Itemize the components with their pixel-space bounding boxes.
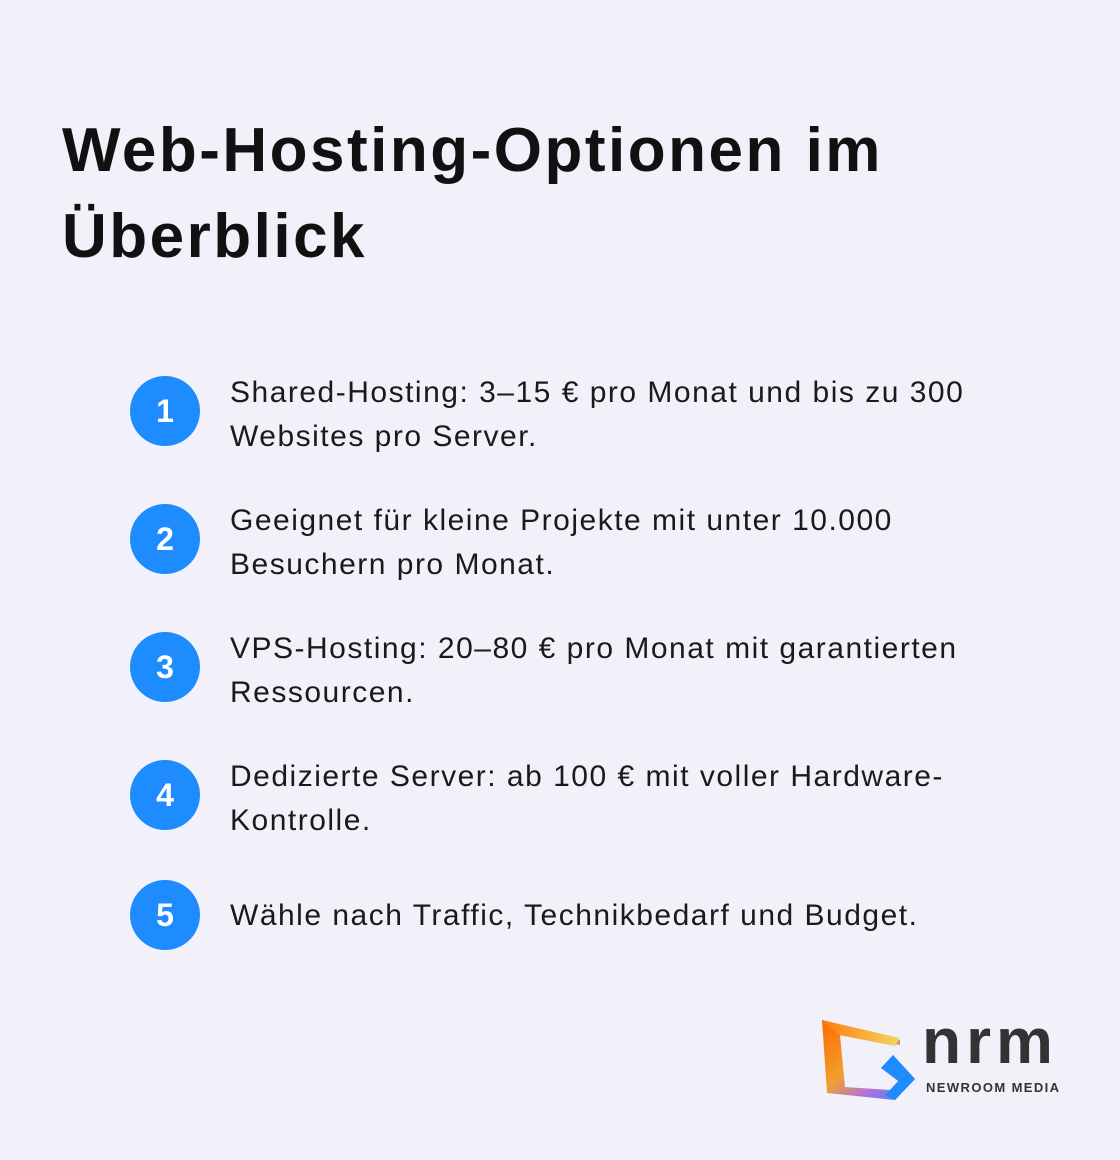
icon: number 2: [130, 504, 200, 574]
item 5: [130, 880, 918, 950]
icon: number 1: 1: [156, 393, 174, 429]
icon: number 1: [130, 376, 200, 446]
icon: number 4: [130, 760, 200, 830]
text 4: [230, 760, 944, 837]
item 2: [130, 504, 893, 581]
icon: number 4: 4: [156, 777, 174, 813]
icon: logo mark: [822, 1020, 915, 1100]
text 3: Ressourcen.: [230, 676, 415, 709]
item 1: [130, 376, 964, 453]
icon: number 2: 2: [156, 521, 174, 557]
icon: number 3: 3: [156, 649, 174, 685]
text 2: Geeignet für kleine Projekte mit unter 10.000: [230, 504, 893, 537]
logo: [822, 1005, 1060, 1100]
logo text: nrm: [922, 1005, 1058, 1077]
title: [62, 116, 883, 271]
text 2: Besuchern pro Monat.: [230, 548, 555, 581]
text 3: VPS-Hosting: 20–80 € pro Monat mit garantierten: [230, 632, 958, 665]
logo: NEWROOM MEDIA: [926, 1080, 1060, 1095]
title: Web-Hosting-Optionen im: [62, 116, 883, 185]
icon: number 5: [130, 880, 200, 950]
title: Überblick: [62, 202, 367, 271]
icon: number 3: [130, 632, 200, 702]
text 1: Shared-Hosting: 3–15 € pro Monat und bis zu 300: [230, 376, 964, 409]
item 3: [130, 632, 958, 709]
text 5: Wähle nach Traffic, Technikbedarf und Budget.: [230, 899, 918, 932]
icon: number 5: 5: [156, 897, 174, 933]
item 4: [130, 760, 944, 837]
text 3: [230, 632, 958, 709]
text 4: Dedizierte Server: ab 100 € mit voller Hardware-: [230, 760, 944, 793]
text 2: [230, 504, 893, 581]
text 1: [230, 376, 964, 453]
text 1: Websites pro Server.: [230, 420, 538, 453]
text 4: Kontrolle.: [230, 804, 372, 837]
